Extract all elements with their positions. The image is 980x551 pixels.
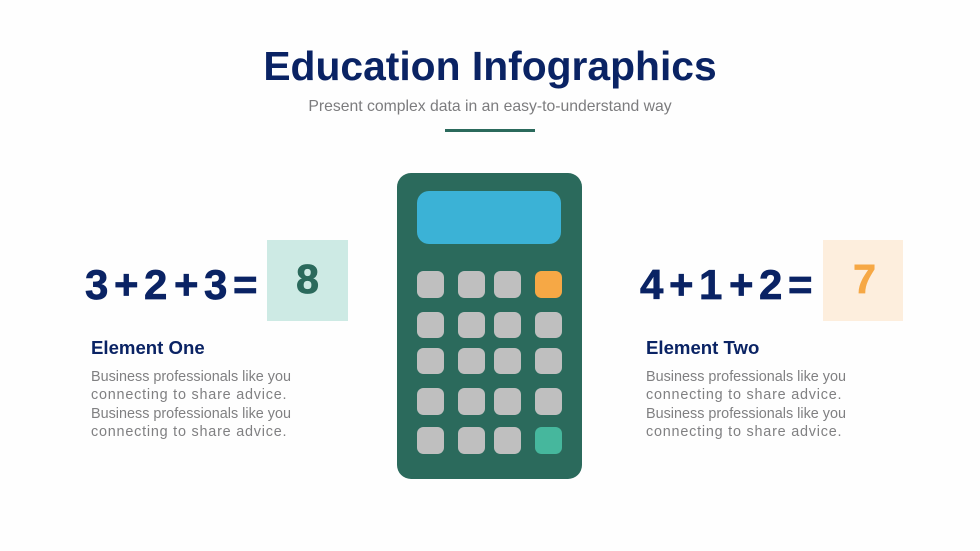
left equation: 3 — [85, 261, 108, 308]
left body text — [91, 369, 291, 440]
right equation: 4 — [640, 261, 663, 308]
left body text: Business professionals like you — [91, 406, 291, 422]
subtitle: Present complex data in an easy-to-understand way — [308, 98, 672, 115]
left heading: Element One — [91, 337, 205, 358]
left equation: + — [114, 261, 139, 308]
right answer box — [823, 240, 903, 321]
right equation: + — [669, 261, 694, 308]
right body text: connecting to share advice. — [646, 387, 842, 403]
calculator keys — [417, 271, 562, 454]
left answer box: 8 — [296, 256, 319, 302]
left equation: 2 — [144, 261, 167, 308]
title underline — [445, 129, 535, 132]
left equation — [85, 261, 258, 308]
title: Education Infographics — [263, 43, 717, 89]
right heading: Element Two — [646, 337, 759, 358]
right equation: 1 — [699, 261, 722, 308]
right body text — [646, 369, 846, 440]
right equation — [640, 261, 813, 308]
right equation: = — [788, 261, 813, 308]
left equation: + — [174, 261, 199, 308]
left equation: = — [233, 261, 258, 308]
right equation: + — [729, 261, 754, 308]
left answer box — [267, 240, 348, 321]
right body text: connecting to share advice. — [646, 424, 842, 440]
right equation: 2 — [759, 261, 782, 308]
right body text: Business professionals like you — [646, 406, 846, 422]
right body text: Business professionals like you — [646, 369, 846, 385]
left body text: connecting to share advice. — [91, 424, 287, 440]
left equation: 3 — [204, 261, 227, 308]
left body text: connecting to share advice. — [91, 387, 287, 403]
calculator display — [417, 191, 561, 244]
left body text: Business professionals like you — [91, 369, 291, 385]
icon: calculator — [397, 173, 582, 479]
right answer box: 7 — [853, 256, 876, 302]
